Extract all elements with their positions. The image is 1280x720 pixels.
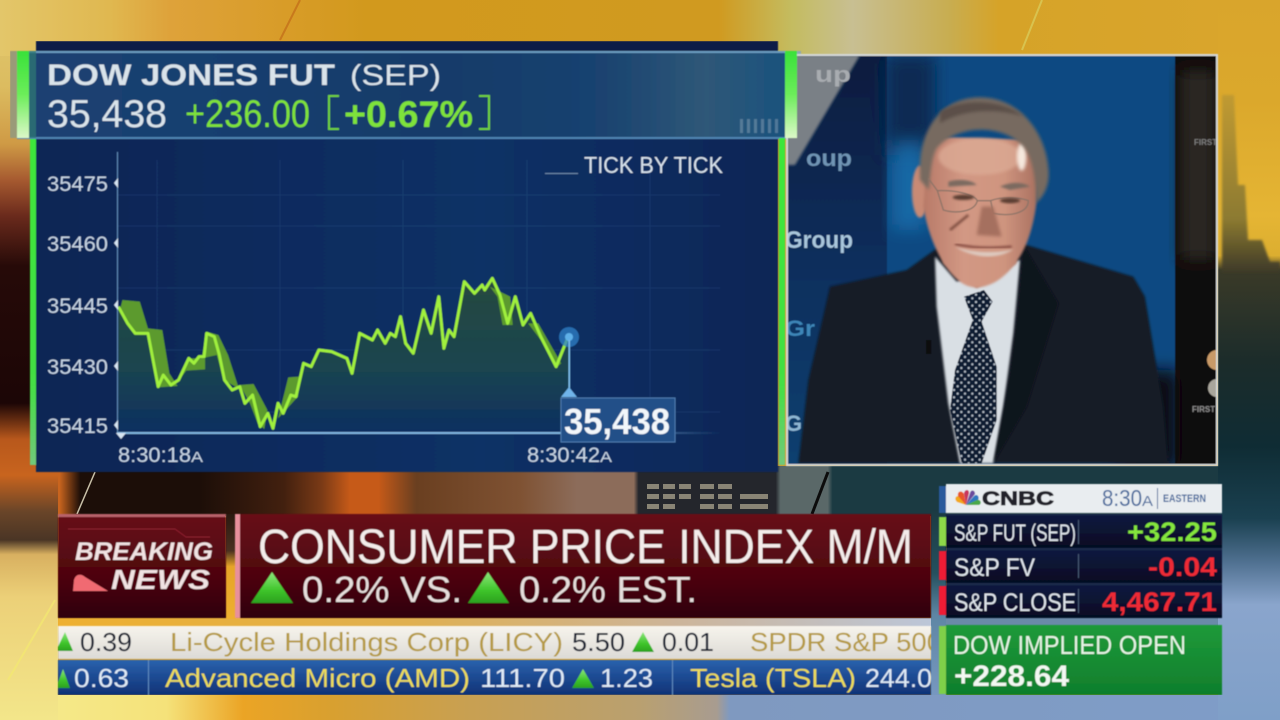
row: S&P futures	[939, 515, 1222, 548]
ticker: top row: 0.01	[662, 627, 714, 657]
x-axis time labels: A	[191, 449, 203, 466]
studio backdrop: Gr	[785, 316, 815, 341]
actual vs estimate values: 0.2% VS.	[302, 569, 462, 610]
contract month: (SEP)	[350, 60, 441, 92]
x-axis time labels	[118, 444, 612, 467]
lapel	[993, 245, 1058, 463]
eyes	[953, 195, 1020, 203]
callout: Dow implied open: +228.64	[954, 660, 1069, 693]
studio backdrop: FIRST	[1194, 138, 1217, 147]
x-axis time labels: A	[600, 449, 612, 466]
x-axis time labels: 8:30:42	[527, 444, 600, 467]
glasses	[928, 178, 1028, 215]
network logo text: CNBC	[982, 489, 1054, 510]
studio backdrop: FIRST	[1192, 405, 1215, 414]
breaking news badge	[58, 514, 226, 618]
y-axis labels: 35415	[47, 415, 108, 438]
y-axis labels: 35475	[47, 173, 108, 196]
ticker: bottom row	[56, 660, 947, 695]
clock time: A	[1142, 493, 1153, 510]
forehead highlight	[938, 138, 1022, 175]
row: S&P close: S&P CLOSE	[954, 589, 1076, 617]
ear	[912, 166, 928, 218]
headline: consumer price index	[235, 514, 931, 618]
studio backdrop: G	[785, 411, 802, 436]
current price callout: 35,438	[564, 401, 670, 442]
row: S&P fair value	[939, 550, 1222, 583]
lapel microphone	[926, 340, 931, 354]
current price marker	[559, 327, 579, 397]
legend: tick by tick: TICK BY TICK	[584, 152, 724, 178]
studio backdrop: oup	[806, 145, 852, 171]
eyebrows	[948, 180, 1030, 190]
ticker: bottom row: 0.63	[74, 663, 129, 693]
market table	[939, 514, 1222, 618]
last price: 35,438	[47, 93, 167, 136]
ticker: top row: 0.39	[80, 627, 132, 657]
chart axes	[114, 152, 720, 439]
network clock header	[939, 484, 1222, 513]
callout: Dow implied open	[939, 625, 1222, 695]
video feed: guest in studio	[779, 51, 1227, 470]
y-axis labels: 35445	[47, 295, 108, 318]
hair	[920, 97, 1049, 203]
index title: DOW JONES FUT	[47, 59, 335, 92]
chart grid	[118, 160, 720, 430]
y-axis labels	[47, 173, 108, 438]
guest figure	[798, 97, 1168, 463]
row: S&P fair value: S&P FV	[954, 554, 1035, 582]
tower silhouette	[1222, 95, 1280, 272]
studio backdrop	[785, 55, 1227, 470]
necktie	[950, 290, 997, 463]
header: index name and quote	[10, 51, 801, 139]
face	[923, 137, 1038, 287]
clock time: EASTERN	[1163, 493, 1206, 505]
ticker: bottom row: 244.00	[865, 663, 947, 693]
net change: +236.00	[185, 93, 310, 136]
headline title: CONSUMER PRICE INDEX M/M	[258, 521, 913, 574]
ticker: bottom row: 111.70	[480, 663, 565, 693]
studio backdrop: up	[815, 62, 851, 87]
icon: peacock logo	[955, 490, 981, 505]
nose and mouth	[950, 207, 1013, 256]
row: S&P futures: +32.25	[1127, 517, 1217, 547]
y-axis labels: 35430	[47, 356, 108, 379]
breaking news badge: BREAKING	[75, 538, 213, 566]
ticker: top row: SPDR S&P 500	[750, 627, 942, 657]
row: S&P close	[939, 585, 1222, 618]
x-axis time labels: 8:30:18	[118, 444, 191, 467]
shirt collar	[935, 257, 1020, 463]
suit jacket	[798, 244, 1168, 463]
ticker: top row: Li-Cycle Holdings Corp (LICY)	[170, 627, 563, 657]
callout: Dow implied open: DOW IMPLIED OPEN	[953, 630, 1186, 660]
ticker: bottom row: 1.23	[600, 663, 653, 693]
studio backdrop: Group	[785, 227, 853, 254]
row: S&P futures: S&P FUT (SEP)	[954, 520, 1076, 547]
clock time	[1102, 485, 1206, 511]
actual vs estimate values: 0.2% EST.	[519, 569, 697, 610]
actual vs estimate values	[251, 569, 697, 610]
clock time: 8:30	[1102, 485, 1142, 511]
breaking news badge: NEWS	[111, 564, 210, 595]
row: S&P close: 4,467.71	[1102, 587, 1217, 617]
ticker: bottom row: Tesla (TSLA)	[690, 663, 856, 693]
ticker: top row: 5.50	[572, 627, 625, 657]
ticker: top row	[56, 626, 942, 659]
line chart: tick by tick prices	[118, 278, 569, 432]
percent change: +0.67%	[344, 94, 473, 135]
neck	[941, 258, 1018, 290]
row: S&P fair value: -0.04	[1148, 552, 1217, 582]
ticker: bottom row: Advanced Micro (AMD)	[165, 663, 470, 693]
y-axis labels: 35460	[47, 233, 108, 256]
panel: Dow Jones futures chart	[30, 41, 785, 472]
